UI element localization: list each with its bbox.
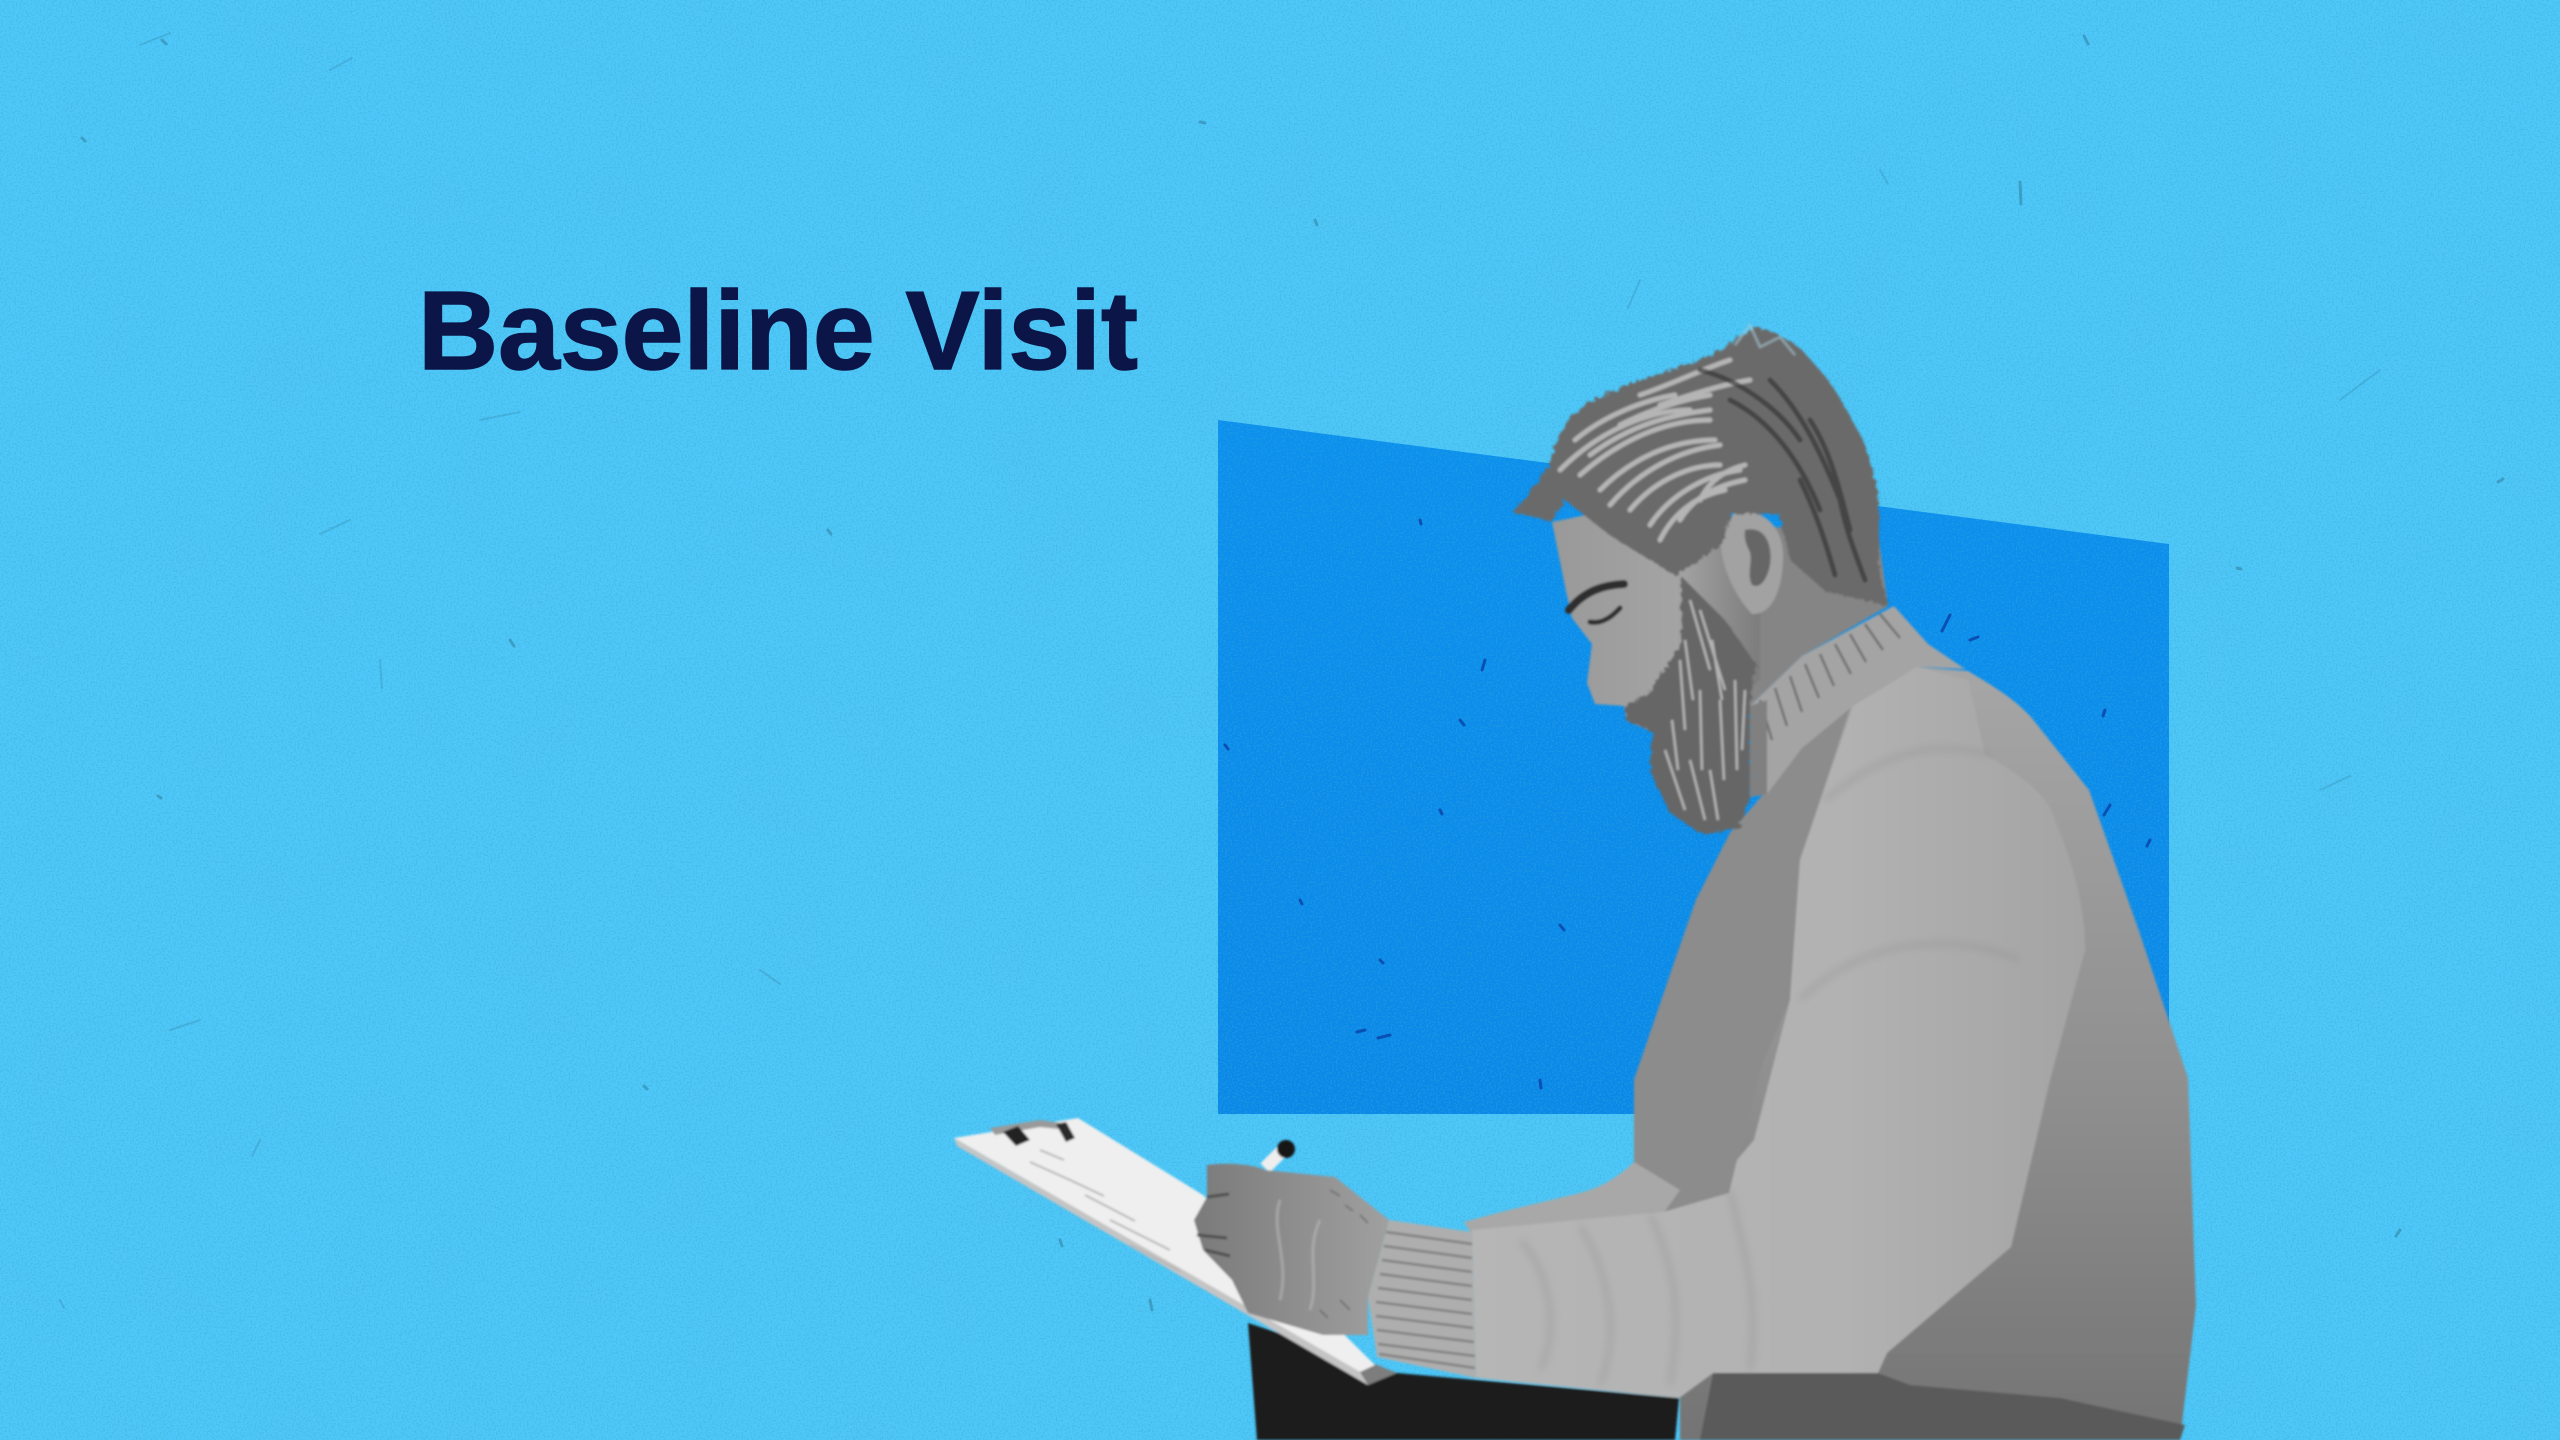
chair back: [1700, 1373, 2185, 1440]
hand: [1194, 1164, 1389, 1335]
ear: [1721, 512, 1783, 614]
far sleeve: [1464, 1162, 1680, 1235]
near sleeve: [1472, 667, 2085, 1398]
pen: [1265, 1140, 1295, 1168]
ribbed collar: [1750, 606, 1965, 797]
panel: darker blue slanted backdrop: [1218, 420, 2169, 1114]
clipboard clip: [990, 1120, 1075, 1146]
clipboard: [954, 1118, 1397, 1385]
beard: [1624, 576, 1756, 834]
dark trousers: [1248, 1323, 1679, 1440]
neck: [1720, 520, 1888, 706]
eye and brow: [1569, 584, 1624, 622]
sweater torso: [1634, 667, 2196, 1440]
sleeve folds: [1520, 749, 2020, 1385]
illustration: man writing on a clipboard: [954, 325, 2196, 1440]
face: [1552, 500, 1760, 732]
title: Baseline Visit: [418, 269, 1138, 393]
hair: [1512, 325, 1888, 606]
ribbed cuff: [1368, 1220, 1476, 1378]
chest shadow strip: [1634, 700, 1853, 1212]
